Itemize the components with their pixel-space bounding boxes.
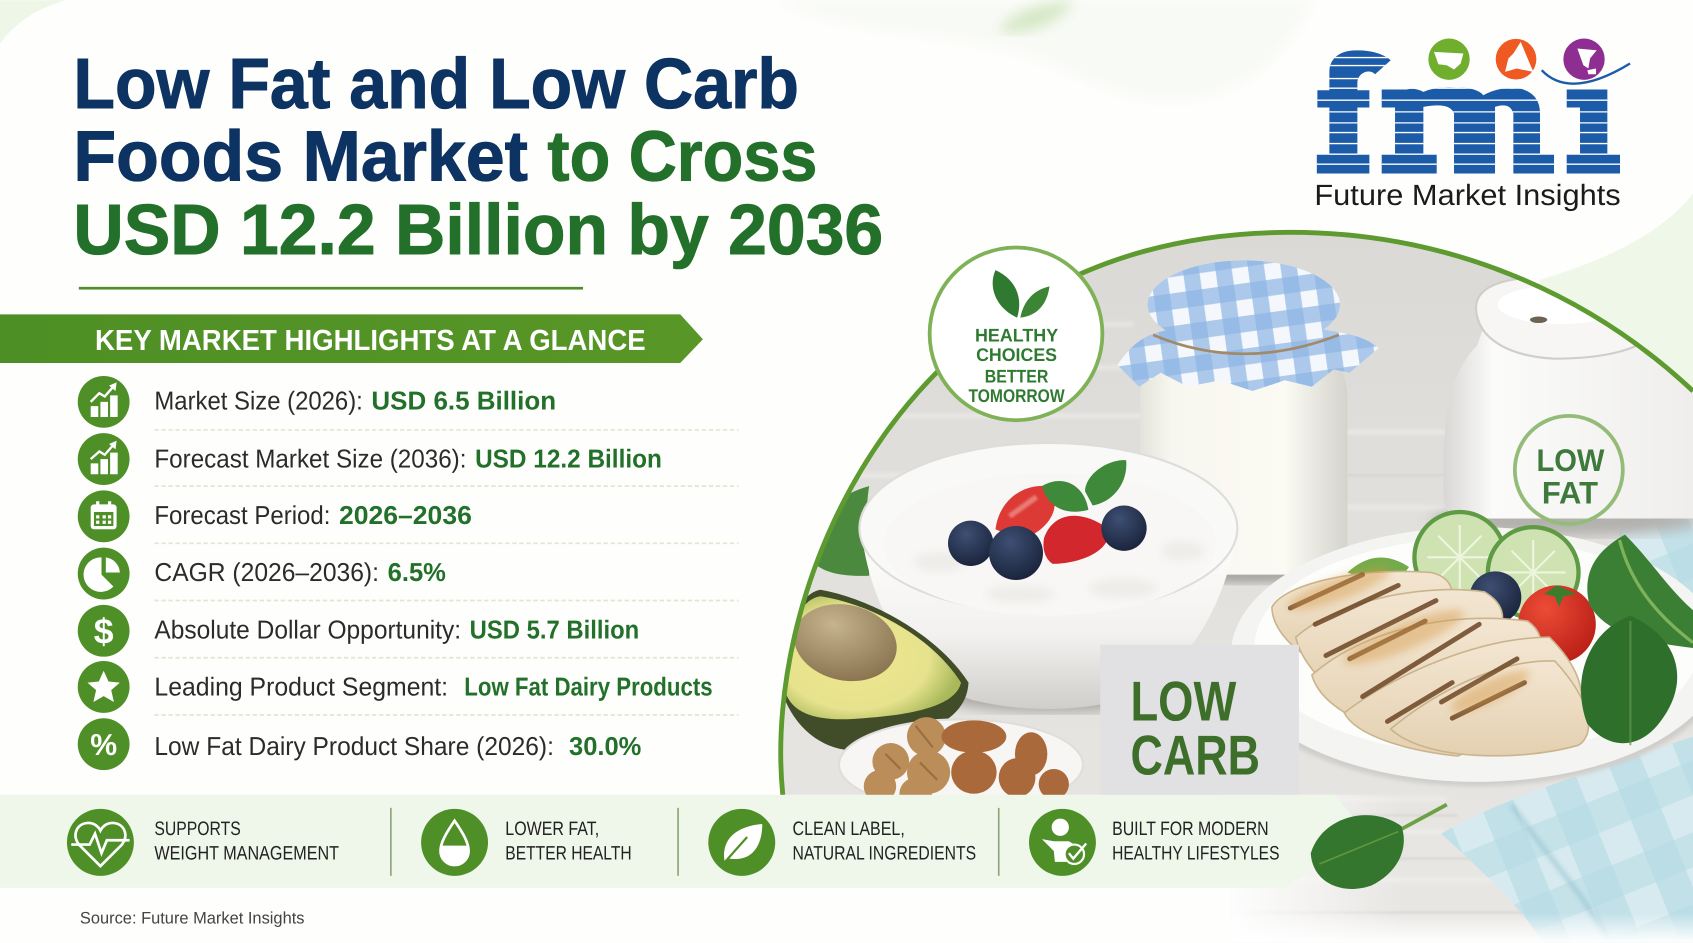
spinach leaf left xyxy=(818,486,870,576)
benefit: clean label xyxy=(793,818,976,864)
row: low fat dairy share: 30.0% xyxy=(569,732,641,761)
low carb card: CARB xyxy=(1130,725,1260,787)
milk jar xyxy=(1118,260,1379,583)
low carb card xyxy=(1100,644,1299,775)
icon: calendar xyxy=(78,490,130,542)
spinach xyxy=(1581,535,1693,745)
white container: LOW xyxy=(1536,444,1605,479)
icon: star xyxy=(78,661,130,713)
white container: FAT xyxy=(1542,476,1598,511)
row: forecast period xyxy=(154,501,472,530)
row: forecast market size: USD 12.2 Billion xyxy=(475,445,662,474)
mint leaves xyxy=(1042,460,1126,512)
row: market size: Market Size (2026): xyxy=(154,387,363,416)
plate with chicken xyxy=(1231,510,1693,786)
row: forecast market size: Forecast Market Size (2036): xyxy=(154,445,466,474)
row: market size xyxy=(154,387,556,416)
title xyxy=(73,43,883,269)
chicken slices xyxy=(1272,571,1589,756)
nuts bowl xyxy=(840,717,1082,795)
food photo panel xyxy=(756,227,1693,943)
white container xyxy=(1431,277,1693,536)
badge: healthy choices: TOMORROW xyxy=(969,386,1065,406)
benefit: modern lifestyles xyxy=(1112,818,1279,864)
icon: percent: % xyxy=(90,728,117,761)
badge: healthy choices: CHOICES xyxy=(976,345,1057,365)
low carb card: LOW xyxy=(1130,671,1237,733)
row: forecast market size xyxy=(154,445,662,474)
icon: dollar: $ xyxy=(94,611,114,651)
logo: Future Market Insights xyxy=(1313,39,1630,212)
icon: person check xyxy=(1029,809,1096,876)
row: CAGR: 6.5% xyxy=(388,558,446,588)
row: leading product segment: Leading Product Segment: xyxy=(154,673,448,702)
benefit: lower fat xyxy=(505,818,632,864)
benefits band xyxy=(0,795,1358,888)
logo wordmark fmi xyxy=(1313,47,1627,177)
benefit: weight management: SUPPORTS xyxy=(154,818,241,839)
banner: key market highlights xyxy=(0,314,703,363)
icon: leaf xyxy=(708,809,775,876)
yogurt bowl xyxy=(859,443,1238,712)
logo region circles xyxy=(1428,39,1630,84)
benefit: modern lifestyles: HEALTHY LIFESTYLES xyxy=(1112,842,1279,864)
badge: healthy choices xyxy=(930,247,1102,420)
benefit: weight management xyxy=(154,818,339,864)
benefit: lower fat: LOWER FAT, xyxy=(505,818,599,839)
title: to Cross xyxy=(547,116,817,196)
row: leading product segment: Low Fat Dairy Products xyxy=(464,673,713,702)
benefit: modern lifestyles: BUILT FOR MODERN xyxy=(1112,818,1269,839)
benefit: weight management: WEIGHT MANAGEMENT xyxy=(154,842,339,864)
towel xyxy=(1441,502,1693,943)
icon: heart weight xyxy=(67,809,134,876)
row: CAGR: CAGR (2026–2036): xyxy=(154,558,379,588)
badge: healthy choices: HEALTHY xyxy=(975,325,1059,346)
icon: bar chart forecast xyxy=(78,433,130,485)
spinach leaf bottom xyxy=(1311,805,1447,889)
source note: Source: Future Market Insights xyxy=(80,909,305,928)
row: forecast period: Forecast Period: xyxy=(154,501,330,530)
title: Low Fat and Low Carb xyxy=(73,43,799,123)
icon: water drop xyxy=(421,809,488,876)
row: absolute dollar opportunity: Absolute Dollar Opportunity: xyxy=(154,616,461,645)
icon: dollar xyxy=(78,605,130,657)
strawberries xyxy=(996,486,1055,534)
badge: healthy choices: BETTER xyxy=(985,366,1048,387)
row: absolute dollar opportunity: USD 5.7 Billion xyxy=(470,616,639,645)
photo arc outline xyxy=(781,232,1693,795)
row: forecast period: 2026–2036 xyxy=(339,501,472,530)
icon: percent xyxy=(78,718,130,770)
title: USD 12.2 Billion by 2036 xyxy=(73,189,883,269)
banner: key market highlights: KEY MARKET HIGHLIGHTS AT A GLANCE xyxy=(95,324,646,357)
icon: leaves xyxy=(993,270,1049,318)
highlights list xyxy=(78,376,739,770)
icon: pie chart xyxy=(78,548,130,599)
title: Foods Market xyxy=(73,116,528,196)
row: absolute dollar opportunity xyxy=(154,616,639,645)
benefit: clean label: NATURAL INGREDIENTS xyxy=(793,842,976,864)
benefit: clean label: CLEAN LABEL, xyxy=(793,818,905,839)
logo tagline: Future Market Insights xyxy=(1314,179,1621,212)
benefit: lower fat: BETTER HEALTH xyxy=(505,842,632,864)
row: low fat dairy share: Low Fat Dairy Product Share (2026): xyxy=(154,732,554,761)
icon: bar chart market size xyxy=(78,376,130,428)
avocado xyxy=(784,590,969,750)
row: leading product segment xyxy=(154,673,713,702)
blueberries xyxy=(948,521,993,566)
row: market size: USD 6.5 Billion xyxy=(371,387,556,416)
